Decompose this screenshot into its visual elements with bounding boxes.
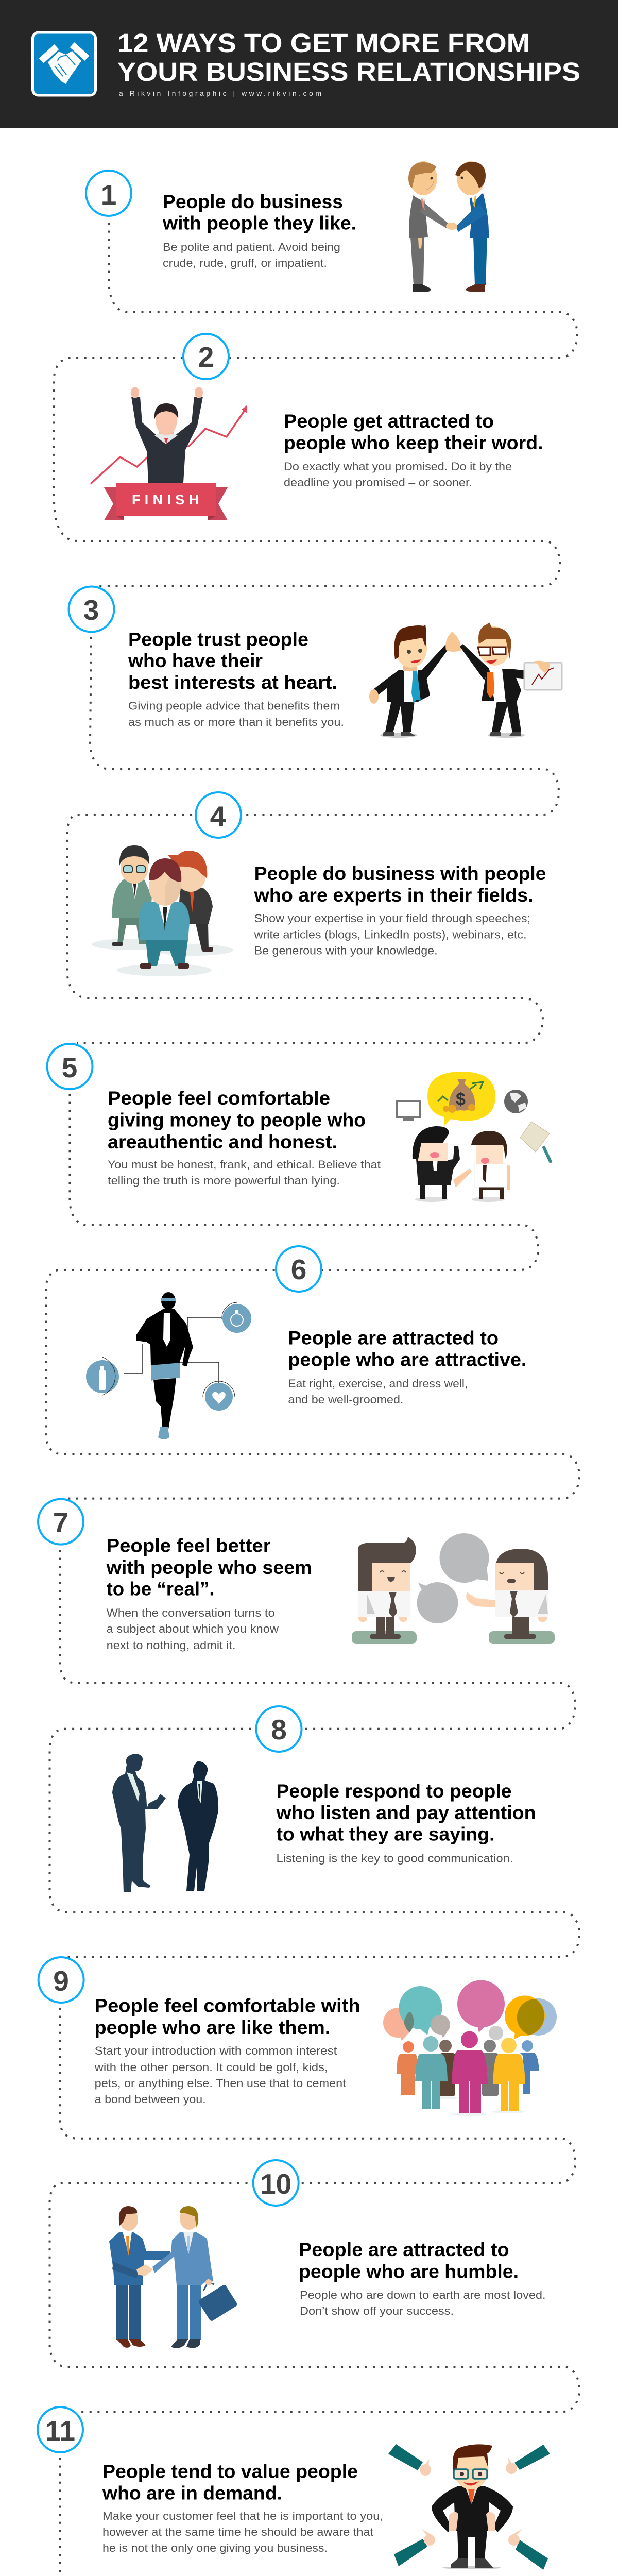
number badge 3 xyxy=(69,586,114,632)
description 7: When the conversation turns to xyxy=(107,1606,275,1619)
number badge 10 xyxy=(253,2160,299,2206)
description 9 xyxy=(94,2044,346,2106)
number badge 2 xyxy=(183,334,229,379)
description 4: Show your expertise in your field through speeches; xyxy=(254,912,530,925)
number badge 4 xyxy=(196,792,241,838)
description 5 xyxy=(108,1158,381,1187)
icon: winner crossing finish ribbon: FINISH xyxy=(132,492,199,507)
heading 2: People get attracted to xyxy=(284,411,494,432)
panel: step 3 xyxy=(69,586,562,738)
number badge 8 xyxy=(256,1706,302,1752)
description 11: Make your customer feel that he is important to you, xyxy=(102,2510,383,2522)
heading 11: who are in demand. xyxy=(102,2483,282,2504)
dotted connecting path xyxy=(46,223,579,2576)
description 9: Start your introduction with common interest xyxy=(95,2044,337,2057)
description 4: write articles (blogs, LinkedIn posts), webinars, etc. xyxy=(254,928,527,941)
subtitle: a Rikvin Infographic | www.rikvin.com xyxy=(119,89,321,97)
description 6: and be well-groomed. xyxy=(288,1393,403,1406)
description 11: he is not the only one giving you business. xyxy=(102,2541,328,2554)
number badge 9 xyxy=(39,1957,84,2003)
heading 9: People feel comfortable with xyxy=(95,1995,360,2016)
heading 8: People respond to people xyxy=(276,1781,512,1802)
heading 5 xyxy=(108,1088,366,1153)
heading 9: people who are like them. xyxy=(95,2017,330,2038)
description 4 xyxy=(254,912,530,957)
description 6: Eat right, exercise, and dress well, xyxy=(288,1377,468,1390)
description 5: You must be honest, frank, and ethical. Believe that xyxy=(108,1158,381,1171)
title: 12 WAYS TO GET MORE FROM xyxy=(117,28,530,58)
heading 5: giving money to people who xyxy=(108,1110,366,1130)
description 3 xyxy=(128,700,344,728)
description 1: Be polite and patient. Avoid being xyxy=(163,241,340,253)
icon: two businessmen silhouettes talking xyxy=(112,1754,218,1892)
number badge 4: 4 xyxy=(210,800,226,832)
heading 10: people who are humble. xyxy=(299,2261,519,2282)
number badge 10: 10 xyxy=(260,2168,291,2200)
description 7: a subject about which you know xyxy=(107,1622,279,1635)
heading 1 xyxy=(162,191,356,234)
panel: step 11 xyxy=(38,2407,550,2570)
icon: running businessman with health icons xyxy=(86,1292,251,1439)
description 9: a bond between you. xyxy=(95,2093,206,2106)
icon: winner crossing finish ribbon xyxy=(91,387,247,520)
heading 9 xyxy=(95,1995,360,2038)
description 3: Giving people advice that benefits them xyxy=(128,700,340,712)
heading 1: with people they like. xyxy=(162,212,356,234)
icon: handshake logo xyxy=(33,32,96,95)
icon: two businessmen shaking hands xyxy=(408,161,489,292)
heading 3 xyxy=(128,629,337,693)
panel: step 6 xyxy=(86,1246,526,1439)
icon: crowd of colourful people with speech bubbles xyxy=(383,1980,557,2116)
description 10: Don’t show off your success. xyxy=(300,2304,454,2317)
number badge 7: 7 xyxy=(53,1506,68,1538)
heading 7: with people who seem xyxy=(106,1557,312,1578)
number badge 9: 9 xyxy=(53,1965,69,1997)
heading 10: People are attracted to xyxy=(299,2239,509,2260)
heading 2: people who keep their word. xyxy=(284,432,543,453)
heading 6: People are attracted to xyxy=(288,1327,499,1349)
number badge 5: 5 xyxy=(62,1052,77,1083)
heading 4 xyxy=(254,863,546,906)
description 1 xyxy=(163,241,340,269)
heading 8 xyxy=(276,1781,536,1845)
heading 6: people who are attractive. xyxy=(288,1349,526,1370)
heading 11 xyxy=(102,2461,358,2504)
number badge 1: 1 xyxy=(101,179,116,211)
heading 5: areauthentic and honest. xyxy=(108,1131,337,1153)
description 6 xyxy=(288,1377,468,1406)
description 11 xyxy=(102,2510,383,2554)
description 9: with the other person. It could be golf, kids, xyxy=(94,2061,328,2074)
number badge 2: 2 xyxy=(198,341,214,373)
heading 3: best interests at heart. xyxy=(128,672,337,693)
number badge 7 xyxy=(38,1499,83,1545)
icon: three experts group xyxy=(92,845,233,976)
heading 4: People do business with people xyxy=(254,863,546,884)
description 1: crude, rude, gruff, or impatient. xyxy=(163,257,327,269)
title xyxy=(117,28,580,87)
heading 3: People trust people xyxy=(128,629,308,650)
icon: money talk with speech bubble xyxy=(397,1072,551,1202)
heading 4: who are experts in their fields. xyxy=(254,885,534,906)
heading 11: People tend to value people xyxy=(102,2461,358,2482)
description 2 xyxy=(284,460,512,489)
heading 10 xyxy=(299,2239,519,2282)
number badge 11: 11 xyxy=(45,2415,75,2447)
description 11: however at the same time he should be aware that xyxy=(102,2526,373,2538)
number badge 6: 6 xyxy=(291,1253,306,1285)
number badge 8: 8 xyxy=(271,1714,287,1745)
description 2: deadline you promised – or sooner. xyxy=(284,476,472,489)
description 7 xyxy=(107,1606,279,1652)
icon: man surrounded by thumbs up xyxy=(388,2444,550,2570)
icon: two people in conversation xyxy=(352,1533,555,1644)
heading 3: who have their xyxy=(128,650,263,671)
panel: step 10 xyxy=(109,2160,546,2348)
title: YOUR BUSINESS RELATIONSHIPS xyxy=(117,57,580,87)
panel: step 7 xyxy=(38,1499,555,1652)
description 2: Do exactly what you promised. Do it by the xyxy=(284,460,512,473)
description 8: Listening is the key to good communication. xyxy=(276,1852,513,1865)
heading 8: to what they are saying. xyxy=(276,1824,494,1845)
description 9: pets, or anything else. Then use that to cement xyxy=(95,2077,346,2090)
heading 7 xyxy=(106,1535,312,1599)
header banner xyxy=(0,0,618,128)
panel: step 5 xyxy=(47,1044,551,1202)
description 5: telling the truth is more powerful than lying. xyxy=(108,1174,340,1187)
heading 8: who listen and pay attention xyxy=(276,1802,536,1823)
description 10: People who are down to earth are most loved. xyxy=(300,2289,546,2301)
icon: money talk with speech bubble: $ xyxy=(456,1090,466,1109)
description 10 xyxy=(300,2289,546,2317)
heading 5: People feel comfortable xyxy=(108,1088,330,1109)
number badge 11 xyxy=(38,2407,83,2452)
panel: step 2 xyxy=(91,334,543,520)
icon: two cartoon businessmen high five xyxy=(369,622,562,738)
description 4: Be generous with your knowledge. xyxy=(254,944,438,957)
panel: step 9 xyxy=(39,1957,557,2116)
number badge 1 xyxy=(86,171,131,216)
panel: step 8 xyxy=(112,1706,536,1892)
heading 7: to be “real”. xyxy=(107,1578,215,1599)
icon: businessmen handshake with briefcase xyxy=(109,2206,238,2348)
description 3: as much as or more than it benefits you. xyxy=(128,716,344,728)
panel: step 4 xyxy=(92,792,546,976)
number badge 6 xyxy=(276,1246,321,1292)
number badge 3: 3 xyxy=(83,594,99,626)
heading 6 xyxy=(288,1327,526,1370)
heading 7: People feel better xyxy=(107,1535,271,1556)
number badge 5 xyxy=(47,1044,93,1089)
panel: step 1 xyxy=(86,161,489,292)
heading 2 xyxy=(284,411,543,453)
heading 1: People do business xyxy=(163,191,343,212)
description 7: next to nothing, admit it. xyxy=(107,1639,236,1652)
